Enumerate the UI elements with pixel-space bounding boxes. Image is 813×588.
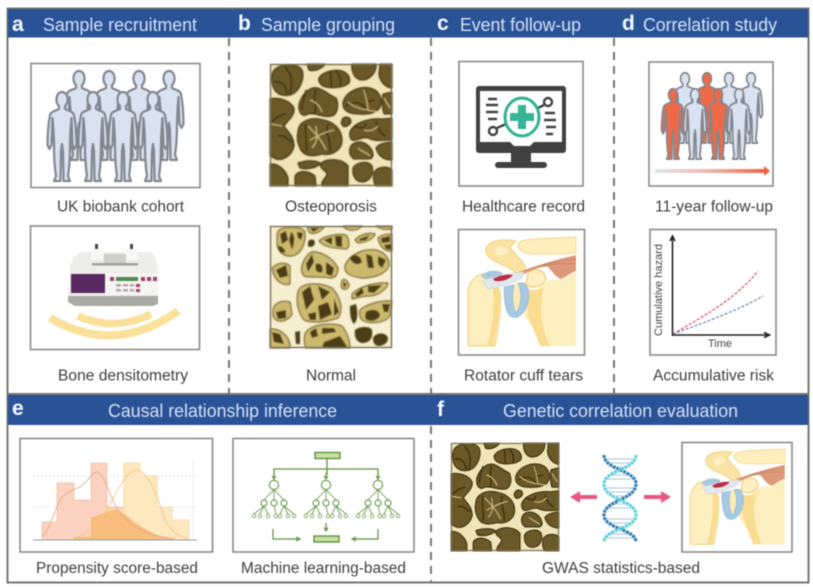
arrow: right to shoulder (644, 491, 671, 503)
caption: Bone densitometry: Bone densitometry (58, 368, 188, 384)
chart: propensity score histogram (20, 438, 212, 552)
chart: cumulative hazard: Cumulative hazard (653, 244, 665, 336)
header c: c (437, 12, 449, 35)
panel: b sample grouping (229, 9, 431, 384)
header a: a (12, 13, 24, 36)
header d: Correlation study (643, 15, 777, 35)
image: bone densitometry machine (30, 226, 200, 350)
header a (8, 9, 229, 38)
icon: healthcare monitor (459, 62, 583, 186)
header e (8, 395, 431, 425)
header c (431, 9, 614, 38)
panel: a sample recruitment (8, 9, 229, 384)
caption: Rotator cuff tears: Rotator cuff tears (464, 368, 583, 384)
panel: e causal relationship inference (8, 395, 431, 577)
caption: Osteoporosis: Osteoporosis (285, 198, 377, 216)
header a: Sample recruitment (43, 15, 197, 35)
image: osteoporotic bone (451, 443, 559, 551)
caption: 11-year follow-up: 11-year follow-up (655, 198, 773, 216)
panel: c event follow-up (431, 9, 614, 384)
caption: UK biobank cohort: UK biobank cohort (57, 198, 185, 216)
header b: b (238, 12, 251, 35)
header d: d (622, 12, 635, 35)
chart: cumulative hazard: Time (708, 338, 732, 350)
header e: Causal relationship inference (108, 401, 337, 421)
header f (431, 395, 808, 425)
image: rotator cuff shoulder (682, 442, 792, 552)
image: follow-up silhouettes with time arrow (649, 62, 773, 186)
diagram: machine learning decision trees (233, 438, 414, 552)
image: rotator cuff shoulder (458, 230, 584, 355)
icon: DNA helix (604, 455, 636, 542)
header f: f (437, 398, 445, 421)
image: normal bone (270, 226, 392, 348)
caption: Healthcare record: Healthcare record (462, 198, 585, 216)
arrow: left to bone (570, 491, 597, 503)
panel: d correlation study (614, 9, 808, 384)
image: cohort silhouettes (31, 64, 200, 188)
header b: Sample grouping (261, 15, 395, 35)
header d (614, 9, 808, 38)
header f: Genetic correlation evaluation (503, 401, 738, 421)
caption: Accumulative risk: Accumulative risk (653, 368, 774, 384)
header b (229, 9, 431, 38)
caption: GWAS statistics-based: GWAS statistics-based (542, 560, 700, 577)
caption: Propensity score-based: Propensity score-based (36, 560, 198, 577)
header c: Event follow-up (460, 15, 581, 35)
header e: e (12, 397, 24, 420)
panel: f genetic correlation evaluation (431, 395, 808, 577)
image: osteoporotic bone (270, 64, 392, 186)
caption: Normal: Normal (306, 368, 356, 384)
chart: cumulative hazard (650, 230, 776, 355)
caption: Machine learning-based: Machine learning-based (241, 560, 406, 577)
